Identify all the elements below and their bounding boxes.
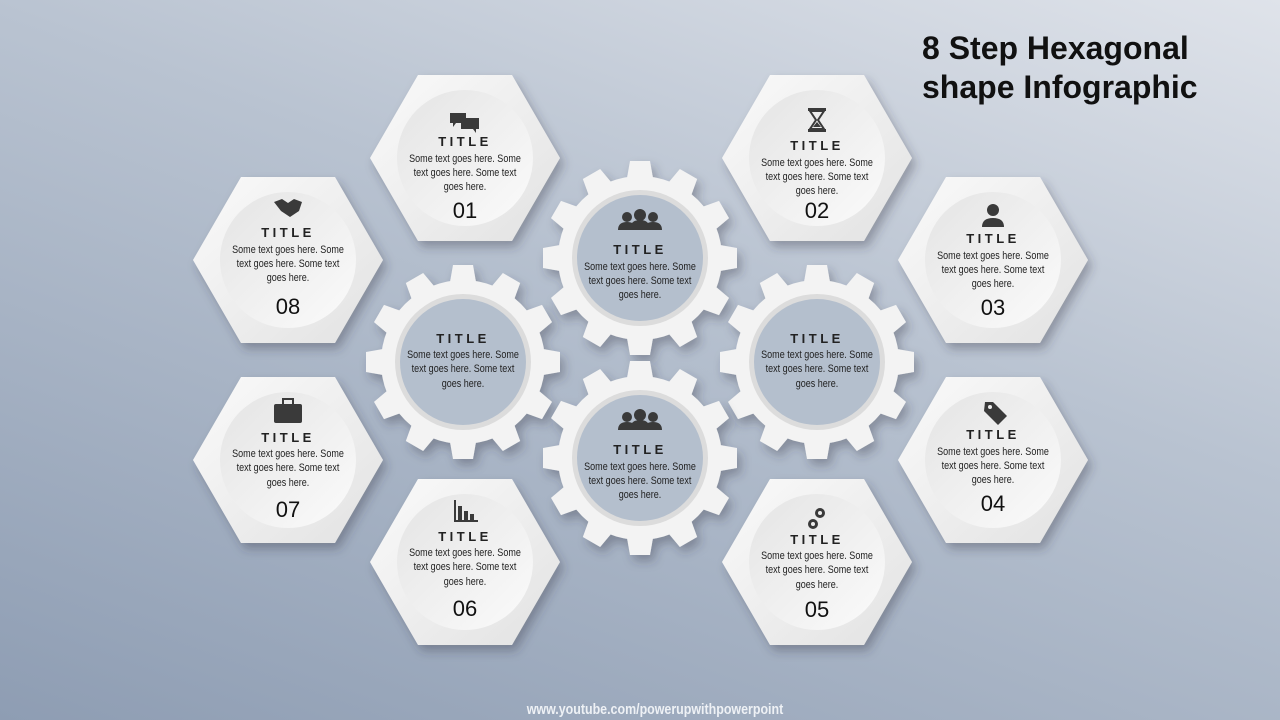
hexagon 07 <box>193 377 383 543</box>
gear: left: TITLE <box>436 331 490 346</box>
gear: left: Some text goes here. Some <box>407 349 519 361</box>
gear: bottom: TITLE <box>613 442 667 457</box>
icon: bar chart <box>454 500 478 522</box>
hexagon 03: goes here. <box>972 278 1014 290</box>
hexagon 07: TITLE <box>261 430 315 445</box>
gear: bottom <box>543 361 737 555</box>
icon: support person <box>982 204 1004 227</box>
hexagon 03: 03 <box>981 295 1005 320</box>
icon: tag <box>984 402 1007 425</box>
hexagon 04: Some text goes here. Some <box>937 446 1049 458</box>
hexagon 04: TITLE <box>966 427 1020 442</box>
hexagon 03: TITLE <box>966 231 1020 246</box>
hexagon 06: Some text goes here. Some <box>409 547 521 559</box>
hexagon 02 <box>722 75 912 241</box>
hexagon 03: Some text goes here. Some <box>937 250 1049 262</box>
hexagon 05: Some text goes here. Some <box>761 550 873 562</box>
gear: left: text goes here. Some text <box>412 363 515 375</box>
title: shape Infographic <box>922 69 1198 105</box>
icon: briefcase <box>274 399 302 423</box>
hexagon 01: TITLE <box>438 134 492 149</box>
icon: team <box>618 409 662 430</box>
hexagon 08 <box>193 177 383 343</box>
footer url: www.youtube.com/powerupwithpowerpoint <box>526 701 784 717</box>
gear: bottom: Some text goes here. Some <box>584 461 696 473</box>
hexagon 06: TITLE <box>438 529 492 544</box>
hexagon 07: goes here. <box>267 477 309 489</box>
title <box>922 30 1198 105</box>
gear: right: TITLE <box>790 331 844 346</box>
hexagon 05: text goes here. Some text <box>766 564 869 576</box>
hexagon 04: text goes here. Some text <box>942 460 1045 472</box>
gear: top: Some text goes here. Some <box>584 261 696 273</box>
hexagon 04 <box>898 377 1088 543</box>
hexagon 08: TITLE <box>261 225 315 240</box>
hexagon 08: text goes here. Some text <box>237 258 340 270</box>
gear: top: goes here. <box>619 289 661 301</box>
hexagon 01: 01 <box>453 198 477 223</box>
hexagon 02: TITLE <box>790 138 844 153</box>
hexagon 01 <box>370 75 560 241</box>
hexagon 04: goes here. <box>972 474 1014 486</box>
hexagon 06: text goes here. Some text <box>414 561 517 573</box>
title: 8 Step Hexagonal <box>922 30 1189 66</box>
hexagon 02: goes here. <box>796 185 838 197</box>
icon: chat <box>450 113 479 133</box>
gear: bottom: goes here. <box>619 489 661 501</box>
hexagon 01: text goes here. Some text <box>414 167 517 179</box>
hexagon 07: Some text goes here. Some <box>232 448 344 460</box>
gear: top: TITLE <box>613 242 667 257</box>
icon: hourglass <box>808 108 826 132</box>
gear: right: Some text goes here. Some <box>761 349 873 361</box>
gear: right: goes here. <box>796 378 838 390</box>
hexagon 06 <box>370 479 560 645</box>
hexagon 03 <box>898 177 1088 343</box>
gear: left <box>366 265 560 459</box>
hexagon 07: 07 <box>276 497 300 522</box>
hexagon 05: goes here. <box>796 579 838 591</box>
gear: right <box>720 265 914 459</box>
hexagon 05: TITLE <box>790 532 844 547</box>
hexagon 04: 04 <box>981 491 1005 516</box>
hexagon 02: text goes here. Some text <box>766 171 869 183</box>
hexagon 03: text goes here. Some text <box>942 264 1045 276</box>
icon: team <box>618 209 662 230</box>
hexagon 05 <box>722 479 912 645</box>
hexagon 02: 02 <box>805 198 829 223</box>
hexagon 05: 05 <box>805 597 829 622</box>
hexagon 01: goes here. <box>444 181 486 193</box>
gear: bottom: text goes here. Some text <box>589 475 692 487</box>
hexagon 08: Some text goes here. Some <box>232 244 344 256</box>
hexagon 06: 06 <box>453 596 477 621</box>
hexagon 08: goes here. <box>267 272 309 284</box>
hexagon 08: 08 <box>276 294 300 319</box>
hexagon 07: text goes here. Some text <box>237 462 340 474</box>
gear: top: text goes here. Some text <box>589 275 692 287</box>
gear: left: goes here. <box>442 378 484 390</box>
hexagon 02: Some text goes here. Some <box>761 157 873 169</box>
gear: top <box>543 161 737 355</box>
hexagon 01: Some text goes here. Some <box>409 153 521 165</box>
gear: right: text goes here. Some text <box>766 363 869 375</box>
icon: handshake <box>274 199 302 217</box>
hexagon 06: goes here. <box>444 576 486 588</box>
icon: gears <box>808 508 825 529</box>
